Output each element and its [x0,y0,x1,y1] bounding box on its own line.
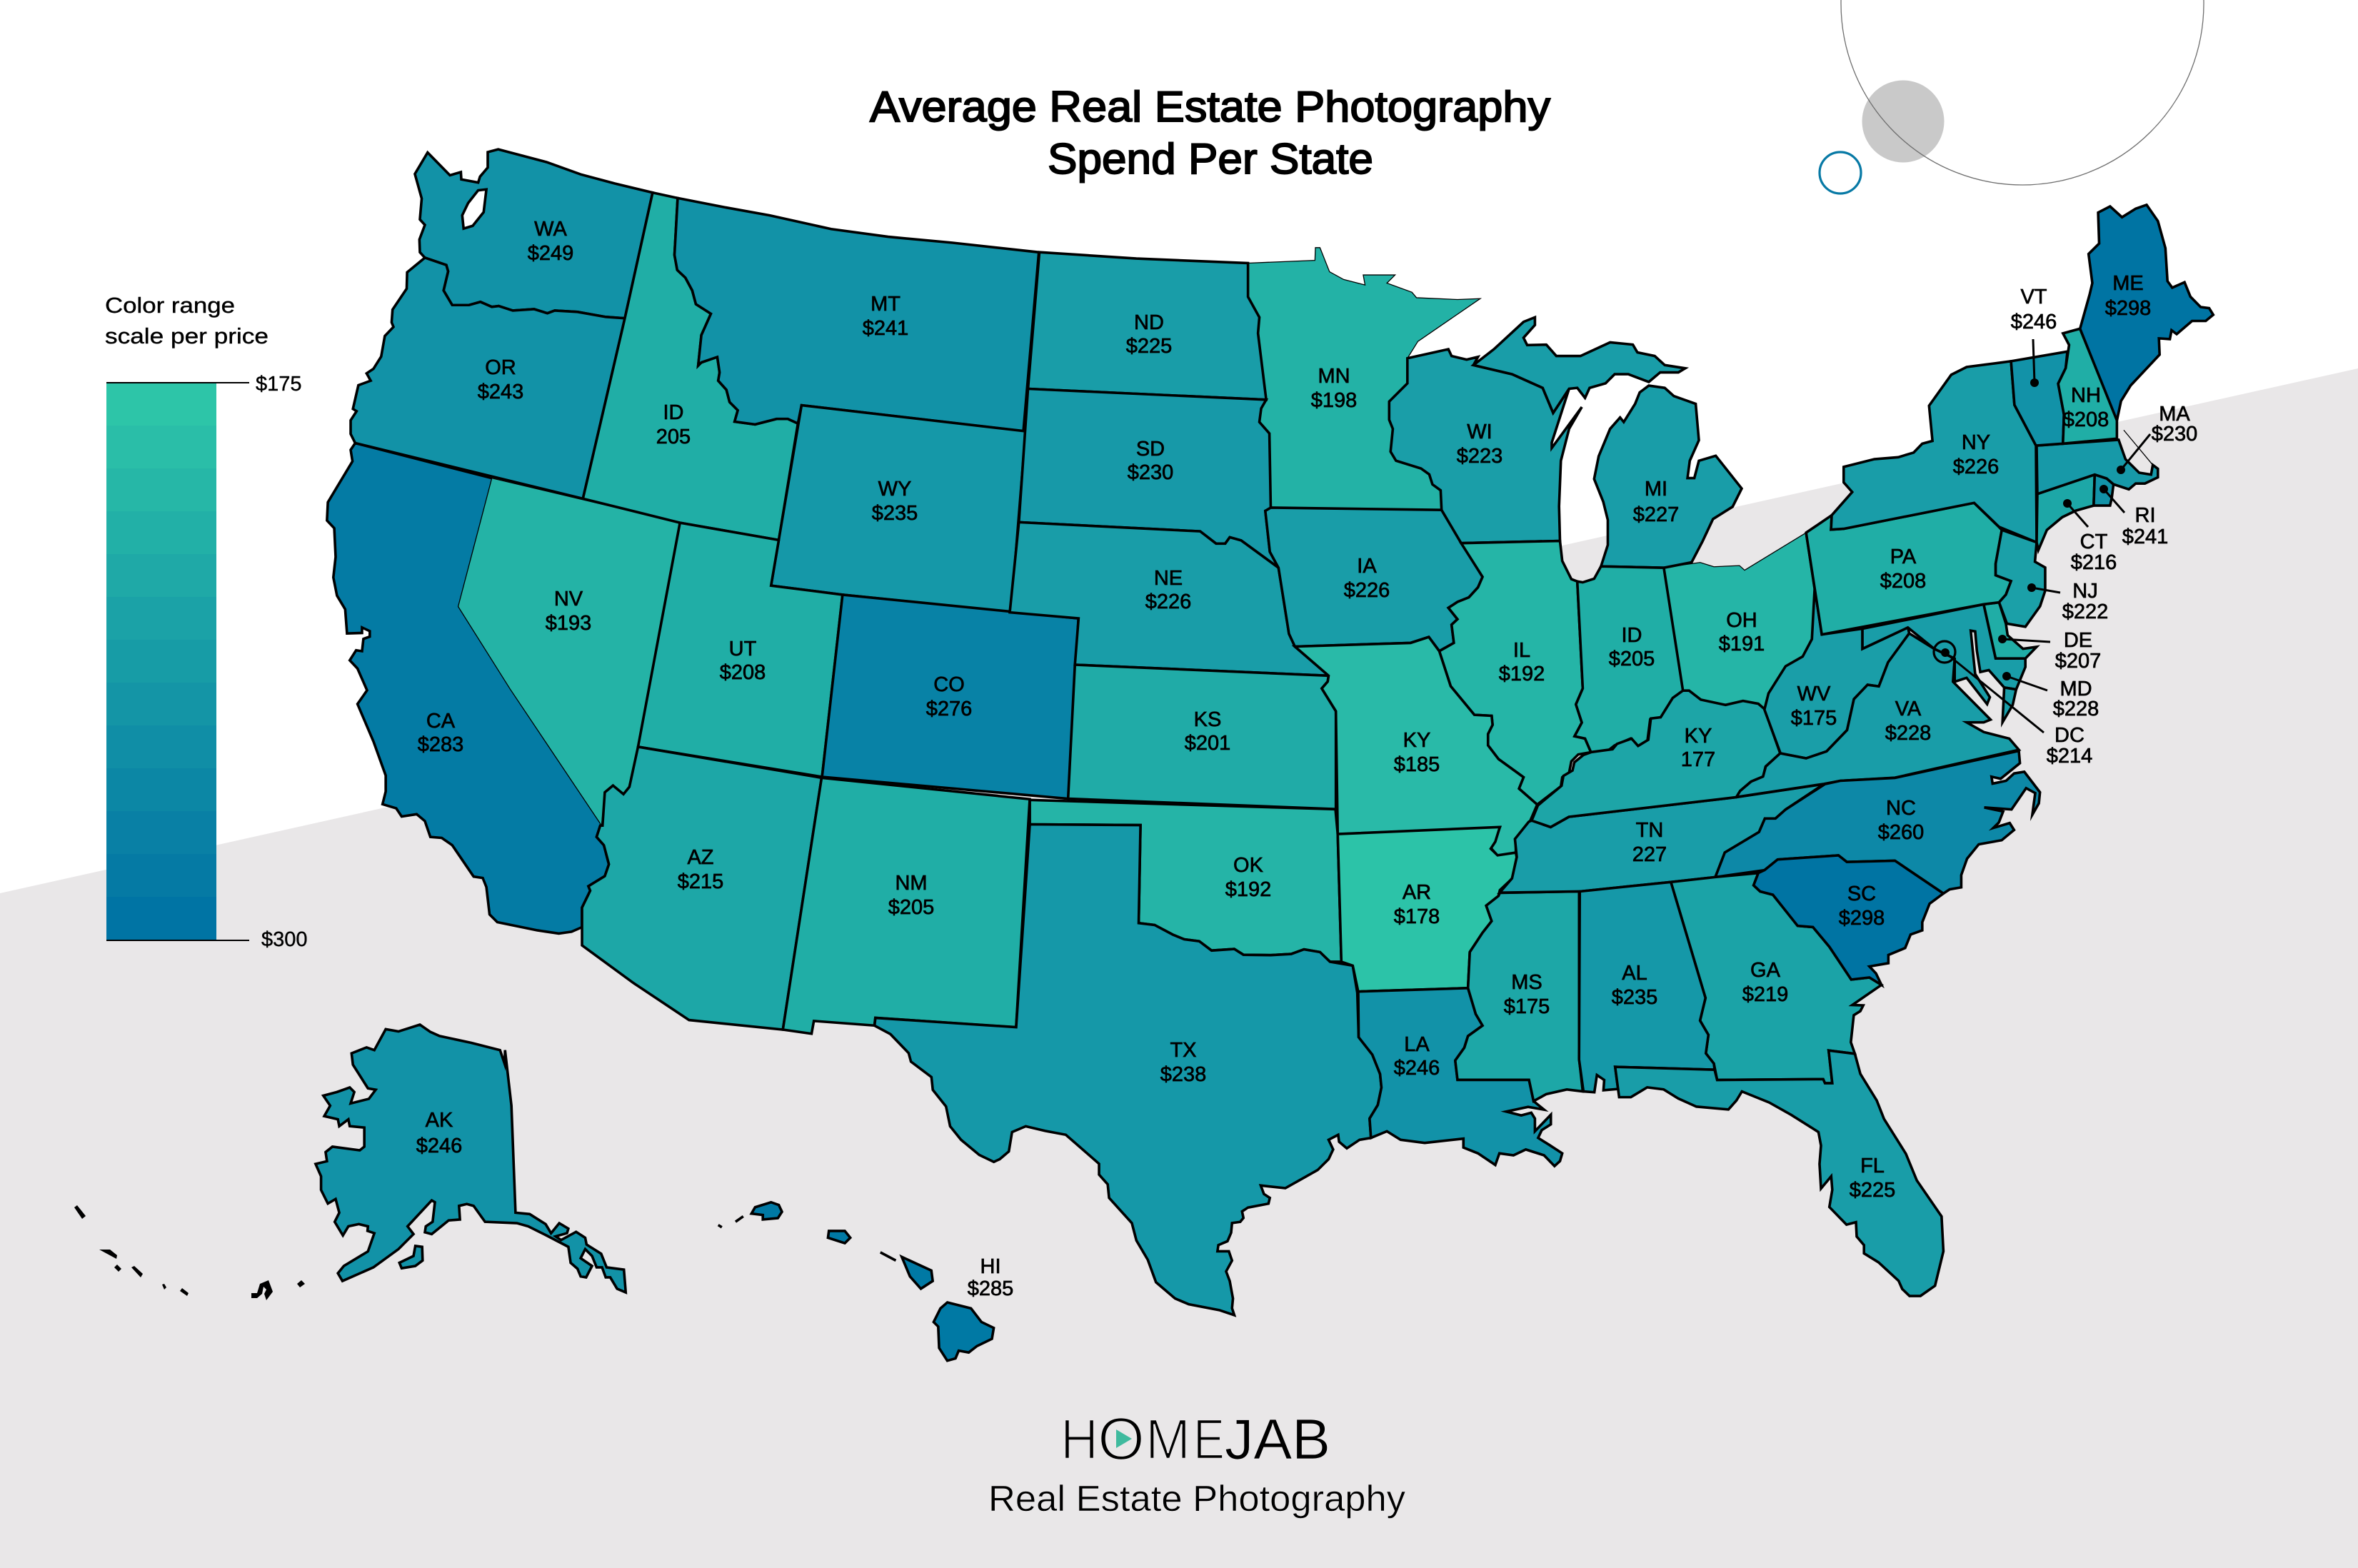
logo: HOMEJAB: E [1193,1407,1225,1471]
state: Iowa: $226 [1344,579,1390,602]
state: Wyoming: WY [878,478,911,501]
state: Alaska: $246 [416,1135,462,1157]
legend: color range scale: $300 [261,928,308,951]
state: New Jersey [1996,530,2045,627]
state: Kentucky [1532,690,1780,827]
callout: Delaware: $207 [2055,650,2101,673]
state: California [327,443,609,933]
state: Illinois: IL [1513,639,1530,662]
state: Missouri (labelled KY): $185 [1394,753,1440,776]
state: Georgia: $219 [1742,983,1788,1006]
state: Texas [875,824,1381,1315]
state: Tennessee: TN [1636,819,1663,842]
state: Georgia: GA [1750,959,1781,982]
logo tagline: Real Estate Photography [988,1478,1406,1519]
state: Mississippi: MS [1511,971,1542,994]
state: Colorado: $276 [926,698,972,720]
state: Oregon: $243 [478,381,523,403]
state: Michigan: MI [1645,478,1667,501]
decorative gray circle [1862,80,1944,163]
title [870,83,1550,183]
state: Texas: TX [1170,1039,1197,1062]
state: Kansas [1068,665,1336,809]
state: Idaho [583,193,798,540]
state: South Carolina [1754,855,1943,985]
state: West Virginia: WV [1797,683,1831,705]
state: Utah [638,523,843,777]
state: Hawaii: $285 [968,1277,1013,1300]
state: South Dakota [1019,389,1278,568]
state: Montana [674,198,1039,431]
callout: Maryland: $228 [2053,698,2099,720]
callout: Vermont: $246 [2011,311,2057,333]
state: Minnesota: $198 [1311,389,1357,412]
state: Kentucky: 177 [1681,748,1715,771]
state: Missouri (labelled KY) [1295,637,1537,855]
state: Maine: $298 [2105,297,2151,320]
state: Minnesota [1248,248,1480,510]
state: West Virginia: $175 [1791,707,1837,730]
state: New Hampshire: NH [2071,384,2101,407]
state: Nevada: NV [554,588,583,610]
state: California: CA [426,710,456,733]
state: Indiana (labelled ID) [1575,566,1683,752]
state: West Virginia [1765,533,1910,758]
callout: New Jersey [2027,580,2108,623]
callout: Rhode Island [2099,485,2168,548]
state: Florida: $225 [1850,1179,1895,1202]
state: Virginia: VA [1895,698,1922,720]
title: Spend Per State [1048,135,1373,183]
callout: Rhode Island: $241 [2122,526,2168,548]
state: Illinois [1439,541,1591,805]
state: Kansas: $201 [1185,732,1230,755]
state: Nevada [458,478,680,825]
state: Virginia [1737,633,2019,797]
state: Georgia [1671,873,1882,1083]
state: Wyoming [771,406,1025,612]
state: Wisconsin: WI [1467,421,1492,443]
callout: Maryland [2002,672,2099,720]
state: Washington [415,149,653,318]
state: Alaska [316,1025,626,1292]
state: Washington: WA [534,218,567,241]
logo: HOMEJAB: JAB [1225,1407,1330,1471]
state: New York: $226 [1953,456,1999,478]
callout: Delaware: DE [2064,629,2092,652]
state: Vermont [2011,351,2067,446]
callout: Connecticut [2063,499,2117,574]
legend: color range scale: Color range [105,293,235,318]
state: Iowa [1265,508,1482,651]
state: Michigan [1473,317,1742,568]
state: Oklahoma: $192 [1225,878,1271,901]
state: Alabama [1579,882,1715,1092]
state: Utah: $208 [720,661,766,684]
state: Illinois: $192 [1499,663,1545,685]
state: Arizona [582,747,822,1030]
callout: District of Columbia: $214 [2047,745,2092,768]
state: Virginia eastern shore [2002,688,2016,723]
state: Mississippi: $175 [1504,995,1550,1018]
state: South Dakota: $230 [1128,461,1173,484]
legend: color range scale [105,293,308,951]
state: Nebraska: $226 [1145,590,1191,613]
callout: Delaware [1998,629,2101,673]
state: Nebraska: NE [1154,567,1183,590]
state: Louisiana [1358,988,1562,1166]
logo: HOMEJAB: M [1145,1407,1190,1471]
state: South Carolina: $298 [1839,907,1885,930]
state: Louisiana: LA [1404,1033,1430,1056]
state: Tennessee [1500,784,1824,893]
state: Ohio: $191 [1719,633,1765,655]
state: Nebraska [1010,522,1328,675]
state: New York: NY [1962,431,1990,454]
state: Alabama: $235 [1612,986,1657,1009]
legend: color range scale: $175 [256,373,302,396]
state: Arizona: AZ [687,846,714,869]
icon: play triangle [1116,1429,1132,1448]
state: North Dakota: $225 [1126,335,1172,358]
state: Arizona: $215 [678,870,723,893]
legend: color range scale: scale per price [105,323,269,348]
state: Wisconsin: $223 [1457,445,1502,468]
callout: District of Columbia: DC [2055,724,2084,747]
state: Hawaii: HI [980,1255,1001,1278]
state: Arkansas [1338,827,1517,992]
state: Alaska: AK [426,1109,453,1132]
state: Indiana (labelled ID): ID [1621,624,1642,647]
state: Pennsylvania [1806,503,2011,635]
state: Virginia: $228 [1885,722,1931,745]
callout: Connecticut: $216 [2071,551,2117,574]
state: Michigan: $227 [1633,503,1679,526]
state: Ohio: OH [1726,609,1757,632]
state: Ohio [1664,533,1815,710]
callout: Massachusetts: MA [2159,403,2190,426]
decorative large outline circle [1841,0,2204,185]
state: Montana: MT [871,293,900,316]
logo: HOMEJAB: O [1098,1405,1145,1472]
state: Maine: ME [2112,272,2144,295]
state: Colorado [822,595,1078,799]
state: North Carolina: NC [1886,797,1916,820]
state: Minnesota: MN [1318,365,1350,388]
callout: Massachusetts: $230 [2152,423,2197,446]
state: Oregon: OR [485,356,516,379]
callout: District of Columbia [1934,641,2092,768]
state: New Hampshire [2058,328,2117,443]
state: Kentucky: KY [1685,725,1712,748]
state: Connecticut [2037,475,2094,550]
state: Utah: UT [729,638,757,660]
state: Wisconsin [1389,349,1582,543]
state: Alabama: AL [1622,962,1647,985]
state: Oklahoma [1030,800,1341,962]
state: Kansas: KS [1194,708,1221,731]
state: New Mexico [783,778,1030,1034]
state: Louisiana: $246 [1394,1057,1440,1080]
state: New York [1831,361,2037,543]
state: Missouri (labelled KY): KY [1403,729,1430,752]
logo: HOMEJAB [1060,1405,1330,1472]
state: Arkansas: AR [1403,881,1431,904]
state: Delaware [1984,603,2037,658]
state: Arkansas: $178 [1394,905,1440,928]
state: Oklahoma: OK [1233,854,1264,877]
logo: HOMEJAB: H [1060,1407,1098,1471]
state: Nevada: $193 [546,612,591,635]
state: Iowa: IA [1357,555,1377,578]
state: Washington: $249 [528,242,573,265]
state: Wyoming: $235 [872,502,918,525]
state: New Hampshire: $208 [2063,408,2109,431]
title: Average Real Estate Photography [870,83,1550,131]
callout: Connecticut: CT [2080,531,2108,553]
decorative teal ring [1820,152,1861,194]
state: Texas: $238 [1160,1063,1206,1086]
state: California: $283 [418,733,463,756]
state: Massachusetts [2037,430,2158,494]
state: Pennsylvania: PA [1890,546,1917,568]
state: Mississippi [1455,891,1582,1101]
callout: New Jersey: NJ [2072,580,2098,603]
state: Montana: $241 [863,317,908,340]
callout: Massachusetts [2117,403,2197,474]
background diagonal panel [0,368,2358,1568]
state: North Carolina: $260 [1878,821,1924,844]
state: North Dakota [1028,252,1266,400]
state: Colorado: CO [933,673,965,696]
state: Florida: FL [1860,1155,1885,1177]
state: Maine [2080,205,2213,421]
state: North Carolina [1715,751,2040,893]
callout: Vermont: VT [2020,286,2047,308]
callouts: northeast states [1934,286,2197,768]
state: North Dakota: ND [1134,311,1164,334]
aleutian islands [74,1205,305,1300]
state: Pennsylvania: $208 [1880,570,1926,593]
state: New Mexico: NM [895,872,928,895]
callout: Rhode Island: RI [2135,504,2155,527]
state: Hawaii [718,1202,1013,1361]
state: Idaho: ID [663,401,684,424]
state: New Mexico: $205 [888,896,934,919]
state: Oregon [351,258,625,498]
callout: Maryland: MD [2060,678,2092,700]
state: South Dakota: SD [1136,438,1165,461]
state: Tennessee: 227 [1632,843,1667,866]
state: Indiana (labelled ID): $205 [1609,648,1655,670]
callout: New Jersey: $222 [2062,600,2108,623]
state: Florida [1615,1050,1943,1296]
state: Idaho: 205 [656,426,691,448]
state: Maryland [1862,604,2025,704]
state: South Carolina: SC [1847,883,1876,905]
state: Rhode Island [2094,475,2114,506]
callout: Vermont [2011,286,2057,387]
